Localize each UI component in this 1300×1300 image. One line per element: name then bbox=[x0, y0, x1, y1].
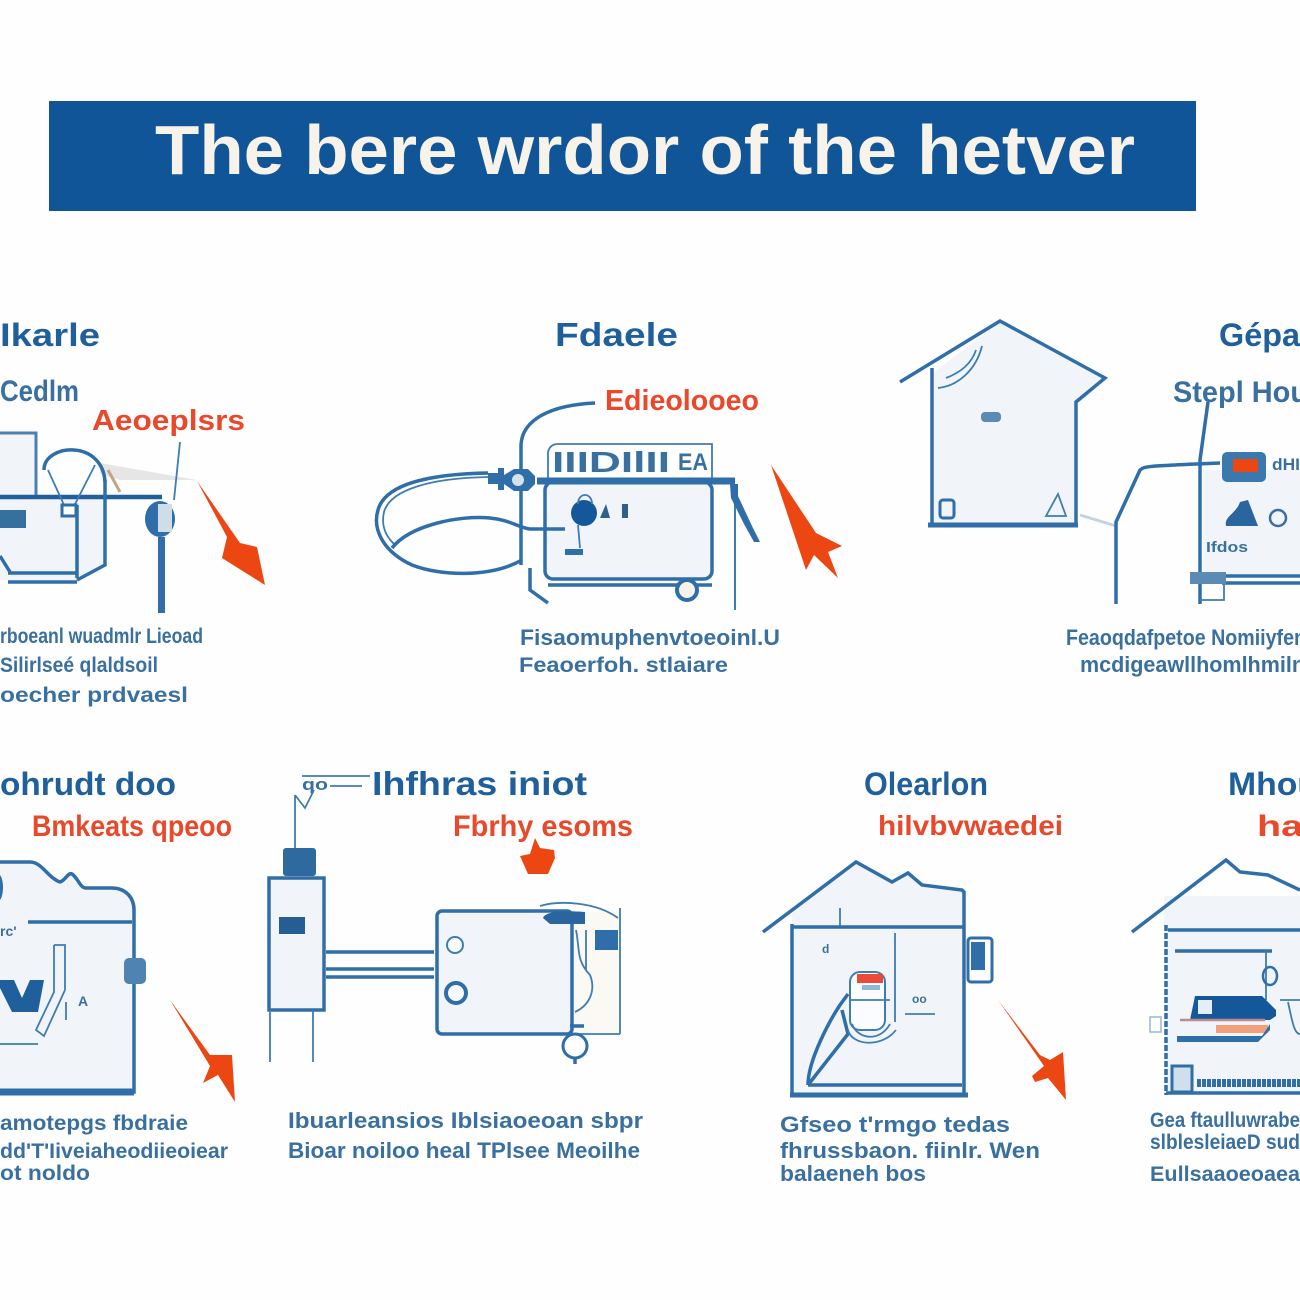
diagram: bottom second tank and boiler bbox=[269, 848, 620, 1064]
orange label: bottom left: Bmkeats qpeoo bbox=[32, 810, 232, 843]
arrow: bottom third bbox=[998, 1000, 1066, 1100]
icon: orange marker bbox=[520, 838, 555, 874]
body text: bottom second: Ibuarleansios Iblsiaoeoan sbpr bbox=[288, 1108, 643, 1133]
body text: bottom third: fhrussbaon. fiinlr. Wen bbox=[780, 1138, 1040, 1163]
heading: bottom second: Ihfhras iniot bbox=[372, 765, 587, 802]
body text: top left: oecher prdvaesl bbox=[0, 684, 188, 707]
heading: bottom left: ohrudt doo bbox=[0, 766, 176, 802]
orange label: top left: Aeoeplsrs bbox=[92, 405, 245, 437]
heading: top middle: Fdaele bbox=[555, 316, 678, 353]
title banner: The bere wrdor of the hetver bbox=[155, 111, 1135, 189]
orange label: bottom third: hilvbvwaedei bbox=[878, 810, 1063, 841]
body text: top left: rboeanl wuadmlr Lieoad bbox=[0, 625, 203, 648]
body text: top middle: Fisaomuphenvtoeoinl.U bbox=[520, 625, 780, 650]
body text: bottom third: Gfseo t'rmgo tedas bbox=[780, 1112, 1010, 1137]
body text: top left bbox=[0, 625, 203, 707]
small callout line: qo bbox=[302, 775, 328, 794]
subheading: top left: Cedlm bbox=[0, 375, 79, 408]
heading: bottom third: Olearlon bbox=[864, 766, 988, 802]
heading: top left: Ikarle bbox=[0, 317, 100, 353]
body text: bottom right bbox=[1150, 1109, 1300, 1186]
diagram: bottom third house bbox=[763, 862, 992, 1096]
panel: bottom third bbox=[763, 766, 1066, 1186]
diagram: bottom right house bbox=[1132, 860, 1300, 1095]
body text: bottom left bbox=[0, 1112, 228, 1185]
arrow: bottom left bbox=[170, 1000, 235, 1102]
diagram: top left tank bbox=[0, 433, 197, 613]
diagram: top right house bbox=[900, 321, 1116, 526]
panel: bottom right bbox=[1132, 766, 1300, 1186]
panel: bottom left bbox=[0, 766, 235, 1185]
body text: bottom second: Bioar noiloo heal TPlsee Meoilhe bbox=[288, 1138, 640, 1163]
body text: bottom third: balaeneh bos bbox=[780, 1161, 926, 1186]
arrow: top left bbox=[197, 481, 265, 585]
panel: top middle bbox=[376, 316, 842, 677]
diagram: top middle machine: IIIDIlII bbox=[552, 447, 670, 479]
panel: top right bbox=[900, 317, 1300, 677]
body text: top middle bbox=[519, 625, 780, 677]
body text: bottom second bbox=[288, 1108, 643, 1163]
orange label: top middle: Edieolooeo bbox=[605, 385, 759, 417]
body text: bottom left: ot noldo bbox=[0, 1162, 90, 1185]
panel: bottom second bbox=[269, 765, 643, 1163]
arrow: top middle bbox=[771, 465, 842, 578]
diagram: top right machine bbox=[1116, 402, 1300, 604]
body text: bottom right: Eullsaaoeoaea bbox=[1150, 1163, 1300, 1186]
diagram: bottom left unit: A bbox=[78, 993, 88, 1009]
diagram: top right machine: dHI bbox=[1272, 455, 1300, 474]
title banner bbox=[49, 101, 1196, 211]
panel: top left bbox=[0, 317, 265, 707]
diagram: top middle machine: EA bbox=[678, 449, 708, 476]
body text: top right bbox=[1066, 625, 1300, 677]
diagram: top middle machine bbox=[376, 403, 760, 610]
orange label: bottom right: ha bbox=[1257, 810, 1300, 843]
body text: top left: Silirlseé qlaldsoil bbox=[0, 654, 158, 677]
body text: bottom left: dd'T'Iiveiaheodiieoiear bbox=[0, 1140, 228, 1163]
body text: bottom third bbox=[780, 1112, 1040, 1186]
diagram: bottom left unit bbox=[0, 862, 146, 1092]
diagram: top right machine: Ifdos bbox=[1206, 539, 1248, 556]
diagram: bottom third house: d bbox=[822, 942, 829, 956]
diagram: bottom left unit: rc' bbox=[0, 923, 17, 939]
diagram: bottom third house: oo bbox=[912, 992, 927, 1006]
orange label: bottom second: Fbrhy esoms bbox=[453, 810, 633, 843]
body text: bottom left: amotepgs fbdraie bbox=[0, 1112, 188, 1135]
body text: top middle: Feaoerfoh. stlaiare bbox=[519, 654, 728, 677]
small callout line bbox=[295, 775, 370, 850]
